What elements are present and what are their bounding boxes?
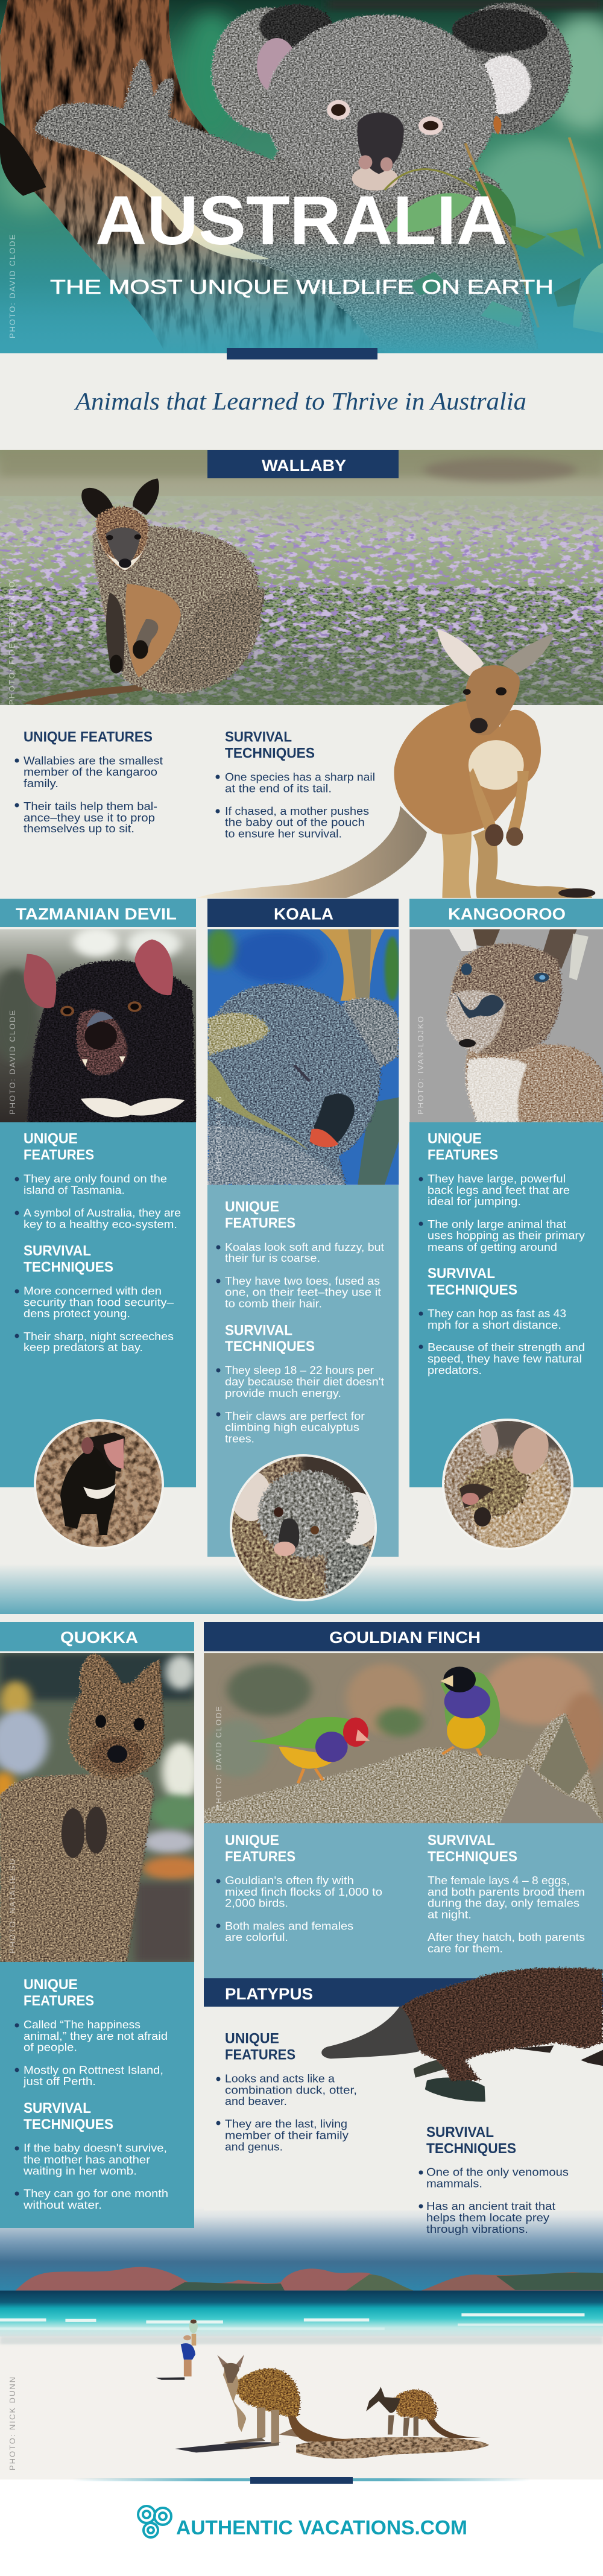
- text: koala: to comb their hair.: [225, 1297, 322, 1309]
- text: kangooroo: uses hopping as their primary: [428, 1229, 586, 1241]
- text: kangooroo: UNIQUE: [428, 1130, 482, 1147]
- text: platypus unique features: They are the last, living: [225, 2118, 347, 2130]
- wallaby panel: survival techniques: [216, 729, 375, 840]
- text: quokka: FEATURES: [24, 1993, 94, 2009]
- text: gouldian unique features: Gouldian's often fly with: [225, 1874, 354, 1887]
- photo credit: quokka: PHOTO: NATALIE SU: [8, 1858, 17, 1954]
- photo credit: gouldian finch: PHOTO: DAVID CLODE: [214, 1706, 223, 1810]
- text: quokka: animal,” they are not afraid: [24, 2030, 168, 2042]
- text: gouldian unique features: UNIQUE: [225, 1832, 279, 1849]
- text: tazmanian devil: More concerned with den: [24, 1285, 162, 1297]
- wallaby panel: unique features: themselves up to sit.: [24, 822, 134, 835]
- text: quokka: of people.: [24, 2041, 77, 2054]
- subtitle: THE MOST UNIQUE WILDLIFE ON EARTH: [50, 276, 554, 298]
- panel backgrounds: tazmanian devil: [0, 1122, 196, 1487]
- text: koala: one, on their feet–they use it: [225, 1285, 381, 1298]
- wallaby title bar: [207, 450, 399, 478]
- photo credit: wallaby: PHOTO: FIDEL FERNANDO: [7, 581, 16, 705]
- text: tazmanian devil: security than food security–: [24, 1296, 174, 1308]
- text: quokka: UNIQUE: [24, 1976, 78, 1993]
- wallaby panel: survival techniques: the baby out of the pouch: [225, 816, 365, 829]
- text: tazmanian devil: dens protect young.: [24, 1307, 130, 1320]
- text: koala: Their claws are perfect for: [225, 1410, 365, 1422]
- text: tazmanian devil: A symbol of Australia, they are: [24, 1206, 181, 1219]
- header: koala: KOALA: [274, 905, 333, 923]
- text: platypus unique features: [216, 2030, 357, 2153]
- wallaby panel: unique features: UNIQUE FEATURES: [24, 729, 153, 745]
- text: tazmanian devil: [14, 1130, 181, 1353]
- wallaby panel: unique features: Their tails help them bal-: [24, 800, 157, 812]
- text: kangooroo: SURVIVAL: [428, 1265, 495, 1282]
- text: kangooroo: predators.: [428, 1364, 482, 1376]
- quokka photo: [0, 1653, 204, 1962]
- header: tazmanian devil: [0, 899, 196, 927]
- text: kangooroo: They have large, powerful: [428, 1172, 566, 1185]
- koala photo: [204, 928, 400, 1185]
- wallaby panel: unique features: Wallabies are the smallest: [24, 754, 163, 767]
- text: gouldian unique features: FEATURES: [225, 1849, 295, 1865]
- panel backgrounds: kangooroo: [409, 1122, 603, 1487]
- panel background: gouldian finch: [204, 1823, 603, 1978]
- wallaby panel: unique features: family.: [24, 777, 58, 790]
- text: kangooroo: The only large animal that: [428, 1218, 566, 1230]
- text: platypus survival techniques: through vibrations.: [426, 2223, 528, 2235]
- wallaby panel: survival techniques: One species has a sharp nail: [225, 771, 375, 783]
- header: quokka: QUOKKA: [60, 1628, 138, 1647]
- beach photo: [0, 2207, 603, 2481]
- text: platypus survival techniques: SURVIVAL: [426, 2124, 494, 2141]
- header: koala: [207, 899, 399, 927]
- text: tazmanian devil: Their sharp, night screeches: [24, 1330, 174, 1343]
- text: kangooroo: They can hop as fast as 43: [428, 1307, 566, 1320]
- text: quokka: the mother has another: [24, 2153, 150, 2166]
- text: tazmanian devil: SURVIVAL: [24, 1242, 91, 1259]
- wallaby panel: unique features: ance–they use it to prop: [24, 811, 155, 824]
- text: quokka: Called “The happiness: [24, 2018, 140, 2031]
- panel backgrounds: koala: [207, 1185, 399, 1557]
- header: quokka: [0, 1622, 194, 1651]
- wallaby title bar: WALLABY: [262, 457, 346, 475]
- text: gouldian unique features: mixed finch flocks of 1,000 to: [225, 1885, 382, 1898]
- text: platypus survival techniques: helps them locate prey: [426, 2211, 550, 2224]
- text: tazmanian devil: They are only found on the: [24, 1172, 167, 1185]
- text: gouldian survival techniques: The female lays 4 – 8 eggs,: [428, 1874, 570, 1887]
- platypus light panel: [204, 2007, 603, 2210]
- text: koala: FEATURES: [225, 1215, 295, 1232]
- section heading: Animals that Learned to Thrive in Australia: [74, 387, 526, 415]
- icon: swirl cloud: [138, 2506, 171, 2537]
- text: kangooroo: TECHNIQUES: [428, 1282, 517, 1298]
- wallaby panel: unique features: [14, 729, 163, 835]
- text: kangooroo: means of getting around: [428, 1241, 557, 1253]
- beach kangaroos: [217, 2355, 481, 2449]
- platypus cut-out: [321, 1967, 603, 2102]
- text: gouldian survival techniques: during the day, only females: [428, 1897, 579, 1910]
- text: platypus survival techniques: Has an ancient trait that: [426, 2200, 555, 2212]
- text: kangooroo: back legs and feet that are: [428, 1183, 570, 1196]
- text: gouldian survival techniques: at night.: [428, 1908, 472, 1920]
- text: quokka: If the baby doesn't survive,: [24, 2141, 167, 2154]
- text: gouldian unique features: 2,000 birds.: [225, 1897, 288, 1910]
- text: platypus survival techniques: mammals.: [426, 2177, 482, 2189]
- wallaby panel: survival techniques: at the end of its tail.: [225, 782, 332, 794]
- photo credit: kangaroo: PHOTO: IVAN-LOJKO: [416, 1016, 425, 1115]
- logo: authentic vacations: [138, 2506, 467, 2539]
- wallaby panel: survival techniques: TECHNIQUES: [225, 745, 315, 762]
- circle photo: tazmanian devil: [34, 1419, 164, 1549]
- platypus title bar: [204, 1978, 603, 2007]
- photo credit: tazmanian devil: PHOTO: DAVID CLODE: [8, 1010, 17, 1115]
- text: quokka: without water.: [23, 2198, 102, 2211]
- header: gouldian finch: [204, 1622, 603, 1651]
- circle photo: koala joey: [229, 1454, 380, 1604]
- text: tazmanian devil: keep predators at bay.: [24, 1341, 143, 1353]
- text: quokka: [14, 1976, 168, 2211]
- standing kangaroo cut-out: [196, 629, 595, 898]
- text: quokka: Mostly on Rottnest Island,: [24, 2063, 163, 2076]
- text: koala: [216, 1198, 384, 1445]
- text: koala: climbing high eucalyptus: [225, 1421, 359, 1434]
- text: koala: day because their diet doesn't: [225, 1375, 384, 1388]
- text: platypus unique features: Looks and acts like a: [225, 2072, 335, 2084]
- photo credit: beach: PHOTO: NICK DUNN: [8, 2376, 17, 2470]
- gradient band: [0, 1564, 603, 1614]
- title: Australia: AUSTRALIA: [95, 182, 508, 259]
- footer white area: [0, 2479, 603, 2576]
- text: gouldian survival techniques: After they hatch, both parents: [428, 1931, 585, 1943]
- text: quokka: They can go for one month: [24, 2187, 168, 2200]
- photo credit: hero: PHOTO: DAVID CLODE: [8, 234, 17, 338]
- text: koala: UNIQUE: [225, 1198, 279, 1215]
- wallaby panel: survival techniques: SURVIVAL: [225, 729, 292, 745]
- logo wordmark: AUTHENTIC VACATIONS.COM: [176, 2516, 467, 2539]
- text: gouldian survival techniques: care for them.: [428, 1942, 503, 1955]
- text: koala: They sleep 18 – 22 hours per: [225, 1364, 374, 1376]
- text: tazmanian devil: island of Tasmania.: [24, 1183, 125, 1196]
- text: gouldian survival techniques: [428, 1832, 585, 1955]
- text: platypus unique features: and genus.: [225, 2140, 283, 2153]
- text: koala: trees.: [225, 1432, 254, 1445]
- text: gouldian survival techniques: SURVIVAL: [428, 1832, 495, 1849]
- hero photo: koala on tree: [0, 0, 603, 353]
- hero navy accent bar: [227, 348, 377, 359]
- text: koala: provide much energy.: [225, 1387, 341, 1399]
- text: tazmanian devil: TECHNIQUES: [24, 1259, 113, 1276]
- photo credit: koala: PHOTO:DAN KB: [214, 1096, 223, 1170]
- panel background: quokka: [0, 1962, 194, 2228]
- text: tazmanian devil: FEATURES: [24, 1147, 94, 1163]
- header: kangooroo: KANGOOROO: [448, 905, 566, 923]
- text: kangooroo: [418, 1130, 586, 1376]
- text: kangooroo: mph for a short distance.: [428, 1318, 561, 1331]
- tazmanian devil photo: [0, 928, 196, 1127]
- text: gouldian unique features: Both males and females: [225, 1919, 353, 1932]
- text: gouldian unique features: [216, 1832, 382, 1943]
- footer divider: [72, 2477, 531, 2484]
- text: gouldian unique features: are colorful.: [225, 1931, 288, 1943]
- text: platypus survival techniques: One of the only venomous: [426, 2166, 569, 2179]
- wallaby panel: survival techniques: to ensure her survival.: [225, 828, 342, 840]
- wallaby panel: unique features: member of the kangaroo: [24, 765, 157, 778]
- text: platypus unique features: combination duck, otter,: [225, 2083, 357, 2096]
- text: koala: They have two toes, fused as: [225, 1274, 380, 1287]
- text: tazmanian devil: key to a healthy eco-system.: [24, 1218, 177, 1230]
- text: gouldian survival techniques: and both parents brood them: [428, 1885, 585, 1898]
- kangaroo portrait photo: [409, 929, 603, 1122]
- header: gouldian finch: GOULDIAN FINCH: [329, 1628, 481, 1647]
- text: koala: Koalas look soft and fuzzy, but: [225, 1241, 384, 1253]
- hero title: [50, 182, 554, 298]
- text: platypus unique features: member of their family: [225, 2129, 349, 2141]
- header: tazmanian devil: TAZMANIAN DEVIL: [16, 905, 177, 923]
- text: platypus unique features: FEATURES: [225, 2047, 295, 2063]
- text: kangooroo: ideal for jumping.: [428, 1195, 521, 1207]
- text: koala: TECHNIQUES: [225, 1338, 315, 1355]
- text: gouldian survival techniques: TECHNIQUES: [428, 1849, 517, 1865]
- wallaby photo: [0, 450, 603, 705]
- text: platypus unique features: and beaver.: [225, 2095, 287, 2107]
- text: quokka: waiting in her womb.: [23, 2165, 137, 2177]
- text: platypus survival techniques: TECHNIQUES: [426, 2141, 516, 2157]
- circle photo: wallaby joey: [442, 1419, 573, 1550]
- text: kangooroo: Because of their strength and: [428, 1341, 585, 1353]
- gouldian finch photo: [204, 1653, 603, 1823]
- platypus title bar: PLATYPUS: [225, 1985, 313, 2003]
- text: platypus survival techniques: [418, 2124, 569, 2235]
- text: quokka: just off Perth.: [23, 2075, 96, 2087]
- text: tazmanian devil: UNIQUE: [24, 1130, 78, 1147]
- text: quokka: TECHNIQUES: [24, 2116, 113, 2133]
- text: koala: their fur is coarse.: [225, 1252, 320, 1264]
- text: quokka: SURVIVAL: [24, 2100, 91, 2116]
- text: kangooroo: speed, they have few natural: [428, 1352, 582, 1365]
- text: platypus unique features: UNIQUE: [225, 2030, 279, 2047]
- wallaby panel: survival techniques: If chased, a mother pushes: [225, 805, 369, 817]
- header: kangooroo: [409, 899, 603, 927]
- text: koala: SURVIVAL: [225, 1322, 292, 1338]
- text: kangooroo: FEATURES: [428, 1147, 498, 1163]
